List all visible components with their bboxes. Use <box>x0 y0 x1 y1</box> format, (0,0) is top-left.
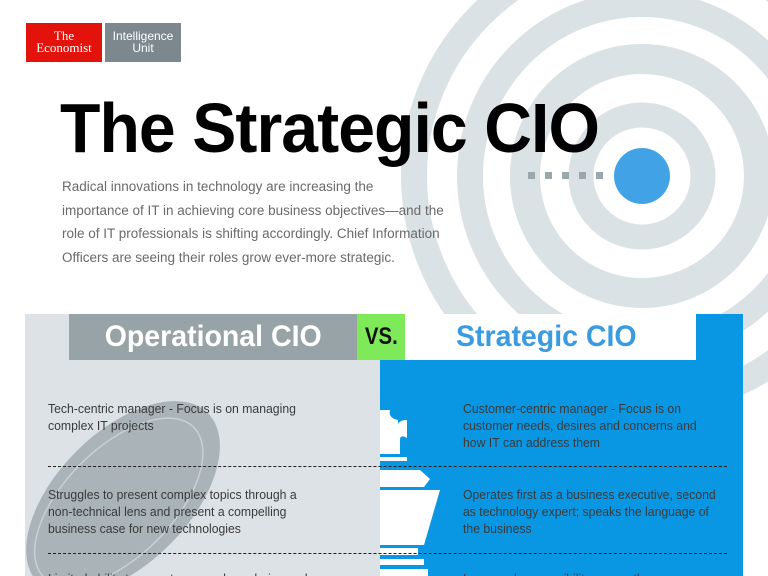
heading bar: Operational CIO vs Strategic CIO: Strategic CIO <box>456 320 637 353</box>
text: row 1 left: Tech-centric manager - Focus is on managing <box>48 401 296 416</box>
text: row 2 right <box>463 487 716 536</box>
icon: mouse <box>26 401 220 576</box>
panel: operational (left) <box>25 314 380 576</box>
intro text: Officers are seeing their roles grow ever-more strategic. <box>62 250 395 264</box>
intro text: role of IT professionals is shifting accordingly. Chief Information <box>62 226 440 241</box>
heading bar: Operational CIO vs Strategic CIO: VS. <box>365 323 397 350</box>
intro text: Radical innovations in technology are increasing the <box>62 179 373 194</box>
text: row 1 left <box>48 401 296 433</box>
divider row 1 <box>48 466 727 467</box>
logo: Intelligence <box>113 29 173 43</box>
heading bar: Operational CIO vs Strategic CIO <box>69 314 696 360</box>
text: row 1 right: Customer-centric manager - Focus is on <box>463 401 681 416</box>
logo: Economist <box>36 40 92 55</box>
logo: Unit <box>132 41 154 55</box>
text: row 1 right <box>463 401 697 450</box>
text: row 2 left: business case for new technologies <box>48 521 241 536</box>
text: row 2 right: Operates first as a business executive, second <box>463 487 716 502</box>
intro text <box>62 179 444 265</box>
text: row 2 left <box>48 487 297 536</box>
text: row 1 left: complex IT projects <box>48 418 154 433</box>
text: row 1 right: customer needs, desires and concerns and <box>463 418 697 433</box>
icon: dotted connector and target dot <box>528 148 670 204</box>
text: row 2 left: Struggles to present complex topics through a <box>48 487 297 502</box>
logo: The <box>54 28 74 43</box>
text: row 2 right: as technology expert; speaks the language of <box>463 504 709 519</box>
text: row 2 left: non-technical lens and present a compelling <box>48 504 286 519</box>
panel: strategic (right) <box>380 314 743 576</box>
text: row 1 right: how IT can address them <box>463 435 600 450</box>
text: row 2 right: the business <box>463 521 532 536</box>
heading bar: Operational CIO vs Strategic CIO: Operational CIO <box>105 320 321 353</box>
text row 3 (cut off at bottom) <box>48 571 650 576</box>
divider row 2 <box>48 553 727 554</box>
title: The Strategic CIO <box>60 89 599 167</box>
icon: chess piece <box>380 410 440 576</box>
logo <box>26 23 181 62</box>
intro text: importance of IT in achieving core business objectives—and the <box>62 202 444 218</box>
